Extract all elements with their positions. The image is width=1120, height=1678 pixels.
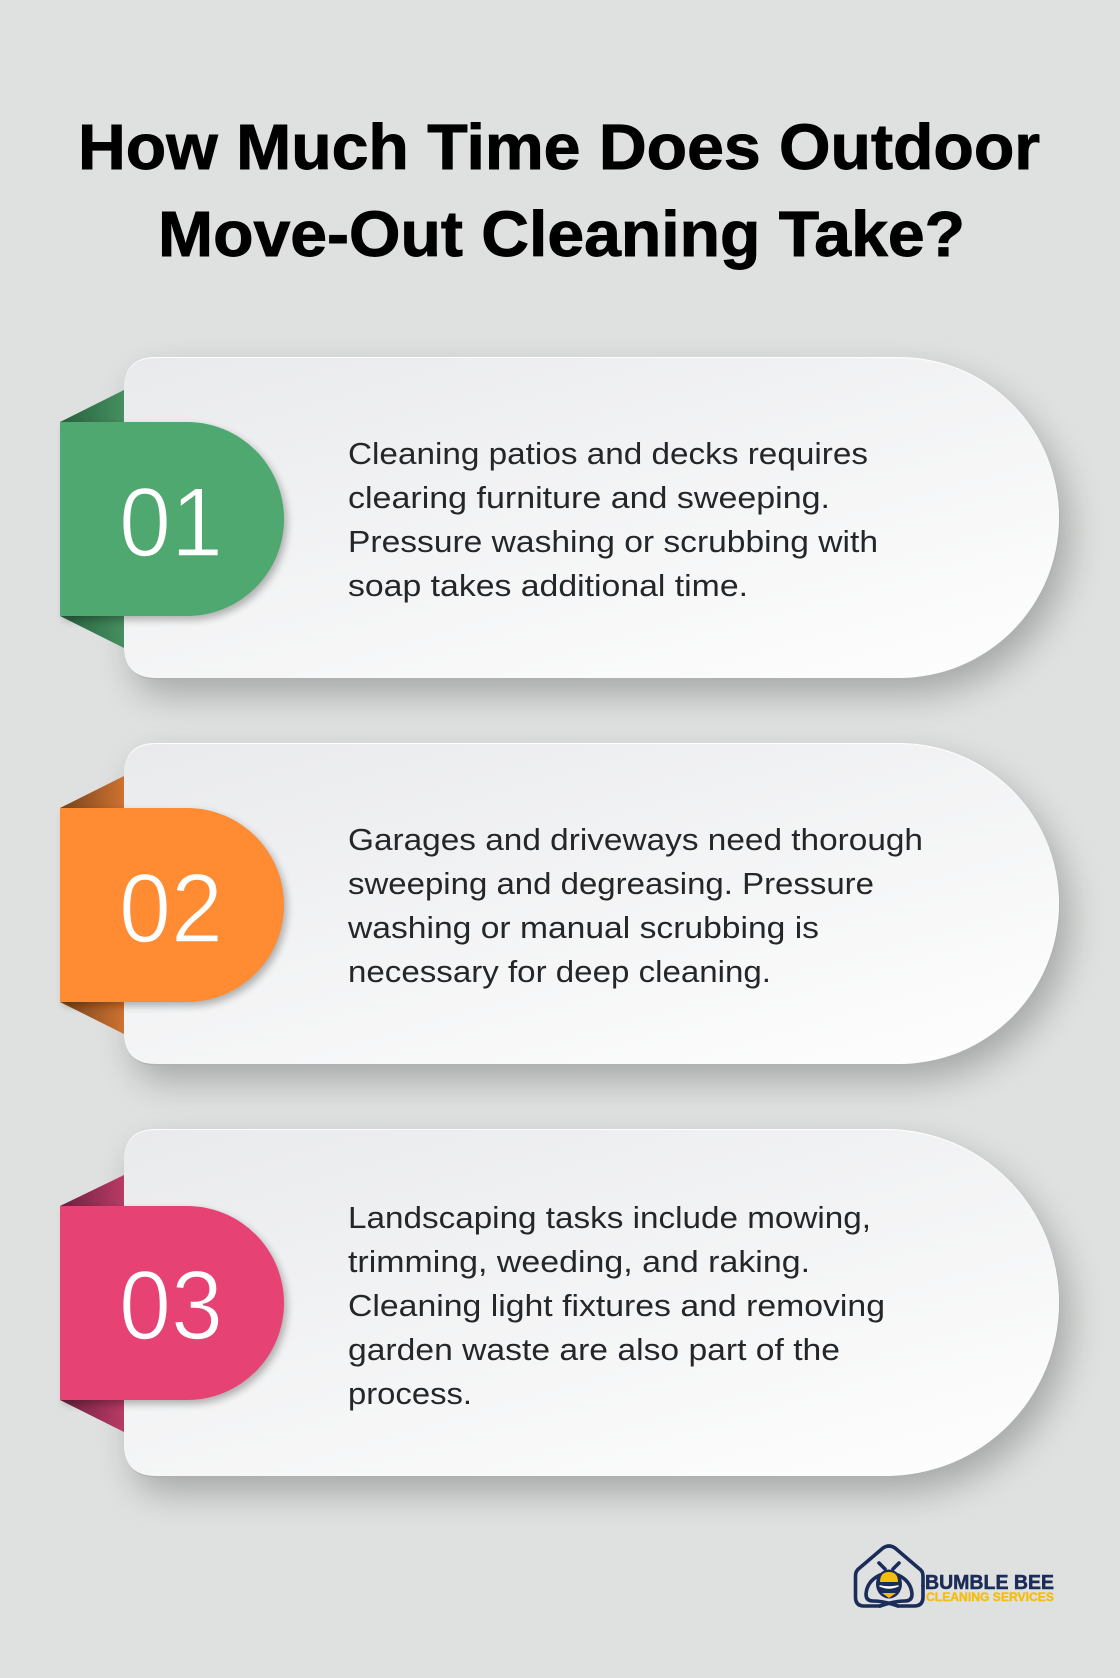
text 3: trimming, weeding, and raking.: [348, 1244, 810, 1279]
badge 1: [60, 422, 287, 620]
badge 3: 03: [119, 1250, 223, 1360]
badge 2 ribbon folds: [60, 776, 124, 1034]
text 1: [348, 436, 878, 603]
badge 3 ribbon folds: [60, 1175, 124, 1432]
text 2: [347, 822, 923, 989]
text 3: garden waste are also part of the: [348, 1332, 840, 1367]
badge 1 ribbon folds: [60, 390, 124, 648]
text 3: Landscaping tasks include mowing,: [348, 1200, 871, 1235]
panel: step 01 patios and decks: [60, 357, 1069, 694]
card 1 surface: [124, 357, 1069, 694]
panel: step 03 landscaping: [60, 1129, 1069, 1492]
text 2: Garages and driveways need thorough: [348, 822, 923, 857]
panel: step 02 garages and driveways: [60, 743, 1069, 1080]
title: How Much Time Does Outdoor: [78, 111, 1040, 183]
badge 3: [60, 1206, 287, 1404]
logo wordmark: BUMBLE BEE: [925, 1572, 1054, 1594]
badge 1: 01: [119, 467, 223, 577]
card 2 surface: [124, 743, 1069, 1080]
card 3 surface: [124, 1129, 1069, 1492]
logo wordmark: CLEANING SERVICES: [926, 1590, 1054, 1604]
text 2: necessary for deep cleaning.: [348, 954, 771, 989]
text 3: process.: [348, 1376, 472, 1411]
text 1: Pressure washing or scrubbing with: [348, 524, 878, 559]
logo: Bumble Bee Cleaning Services: [856, 1546, 1054, 1606]
badge 2: [60, 808, 287, 1006]
text 3: Cleaning light fixtures and removing: [348, 1288, 885, 1323]
text 2: sweeping and degreasing. Pressure: [348, 866, 874, 901]
text 3: [348, 1200, 885, 1411]
title: Move-Out Cleaning Take?: [158, 198, 965, 270]
logo wordmark: [925, 1572, 1054, 1604]
text 1: soap takes additional time.: [348, 568, 748, 603]
text 1: Cleaning patios and decks requires: [348, 436, 868, 471]
icon: house with bee: [856, 1546, 923, 1606]
text 1: clearing furniture and sweeping.: [348, 480, 830, 515]
title: [78, 111, 1040, 270]
text 2: washing or manual scrubbing is: [347, 910, 819, 945]
badge 2: 02: [119, 853, 223, 963]
